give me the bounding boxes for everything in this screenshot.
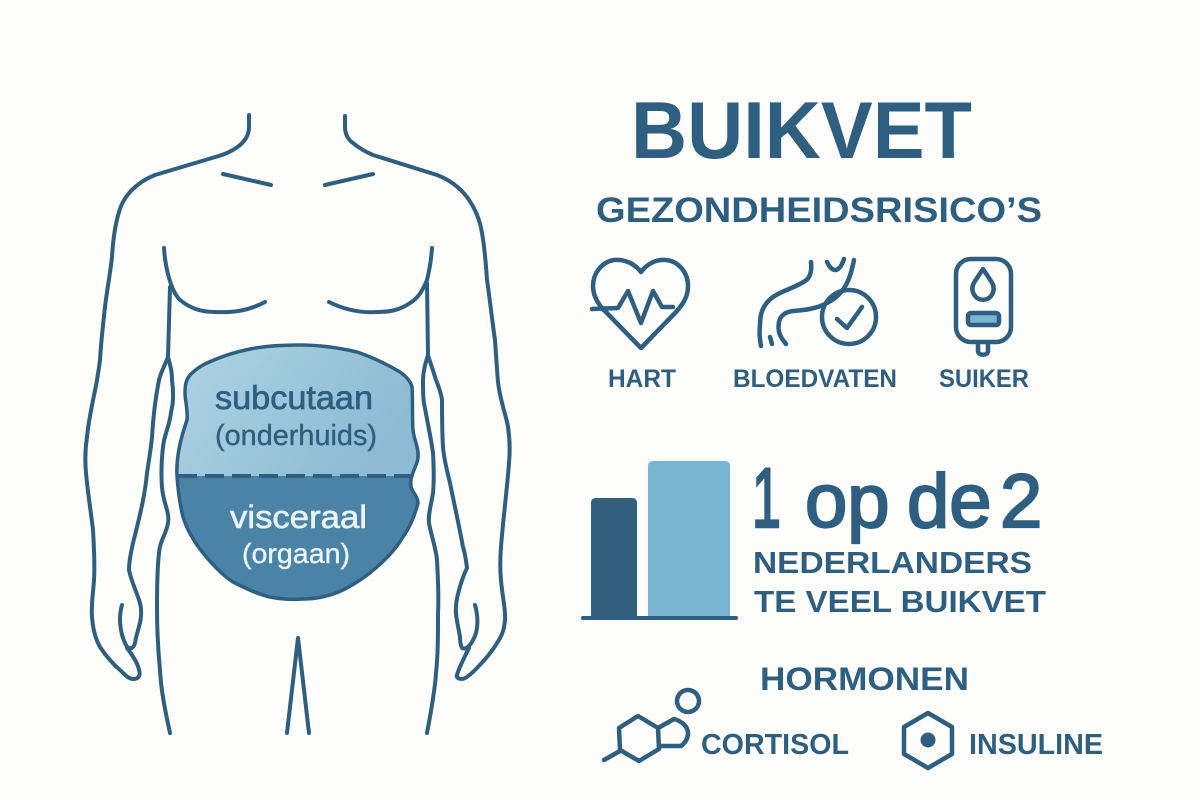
icon: insulin hexagon — [904, 713, 952, 768]
label: hart: HART — [608, 365, 676, 393]
title: BUIKVET — [631, 86, 972, 176]
icon: heart — [592, 260, 688, 348]
dashed divider — [178, 474, 411, 478]
label: cortisol: CORTISOL — [701, 729, 849, 761]
right chest — [329, 248, 432, 312]
bar: dark — [591, 498, 637, 617]
left torso side — [157, 357, 173, 733]
statistic: 1 op de 2: de — [907, 459, 992, 544]
right torso side — [423, 355, 438, 733]
left chest — [164, 248, 265, 312]
label: insuline: INSULINE — [969, 729, 1103, 761]
left collarbone — [223, 174, 271, 185]
subtitle: GEZONDHEIDSRISICO’S — [596, 191, 1042, 230]
label: onderhuids: (onderhuids) — [215, 420, 377, 452]
icon: cortisol molecule — [604, 690, 699, 761]
icon: blood vessels — [760, 259, 876, 346]
inner legs — [287, 638, 309, 733]
bar: light — [648, 461, 730, 617]
body outline — [85, 115, 510, 733]
belly outline — [177, 345, 418, 599]
label: subcutaan: subcutaan — [215, 379, 373, 416]
baseline — [583, 616, 736, 620]
label: suiker: SUIKER — [939, 365, 1029, 393]
right shoulder and arm — [345, 116, 510, 679]
statistic: 1 op de 2: op — [805, 459, 890, 544]
bar chart — [583, 461, 736, 618]
label: bloedvaten: BLOEDVATEN — [733, 365, 897, 393]
right collarbone — [325, 174, 373, 185]
visceral fat region — [177, 476, 418, 599]
belly fat diagram — [177, 345, 418, 599]
statistic caption line 1: NEDERLANDERS — [753, 545, 1032, 580]
icon: glucose meter — [956, 259, 1011, 355]
subcutaneous fat region — [177, 345, 418, 476]
statistic: 1 op de 2 — [752, 451, 1042, 545]
label: orgaan: (orgaan) — [242, 538, 350, 569]
statistic caption line 2: TE VEEL BUIKVET — [754, 584, 1046, 619]
left shoulder and arm — [85, 115, 249, 679]
left thumb and inner arm — [120, 287, 170, 648]
right thumb and inner arm — [427, 283, 477, 649]
statistic: 1 op de 2: 1 — [752, 451, 781, 545]
heading: hormonen: HORMONEN — [760, 661, 969, 697]
statistic: 1 op de 2: 2 — [1000, 459, 1042, 544]
label: visceraal: visceraal — [230, 499, 367, 535]
